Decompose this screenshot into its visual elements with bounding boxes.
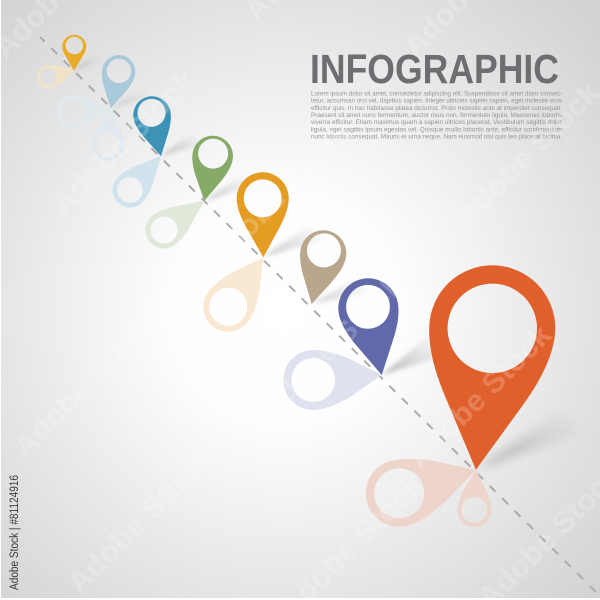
stock credit: Adobe Stock | #81124916: [9, 475, 21, 590]
pin 4: green: [184, 132, 236, 204]
body text: [311, 90, 562, 141]
ghost pin: blue reflection: [105, 144, 174, 215]
watermark: Adobe Stock: [450, 76, 600, 233]
pin 7: indigo: [333, 273, 411, 381]
watermark: Adobe Stock: [46, 64, 202, 221]
watermark: Adobe Stock: [254, 268, 410, 425]
watermark: Adobe Stock: [202, 116, 358, 273]
pin 8: large red-orange: [413, 258, 562, 477]
watermark: Adobe Stock: [62, 443, 218, 600]
body text: Lorem ipsum dolor sit amet, consectetur adipiscing elit. Suspendisse sit amet diam consec-: [311, 90, 562, 97]
ghost pin: indigo reflection: [281, 345, 384, 412]
body text: efficitur quis. In hac habitasse platea dictumst. Proin molestie ante at imperdiet consequat.: [311, 105, 562, 112]
body text: ligula, eget sagittis ipsum egestas vel. Quisque mollis lobortis ante, efficitur condimentum: [311, 126, 562, 133]
ghost pin: light blue reflection left: [55, 92, 112, 130]
pin 5: orange: [236, 172, 289, 258]
ghost pin: light blue reflection below: [91, 107, 127, 162]
body text: Praesent sit amet nunc fermentum, auctor risus non, fermentum ligula. Maecenas lobortis: [311, 112, 562, 119]
pin 3: blue: [130, 93, 179, 160]
drop shadows of pins: [74, 55, 582, 470]
watermark: Adobe Stock: [402, 318, 558, 475]
pin 1: yellow: [62, 34, 87, 71]
body text: tetur, accumsan orci vel, dapibus sapien. Integer ultricies sapien sapien, eget molestie eros: [311, 98, 562, 105]
pin 6: tan: [289, 226, 351, 309]
title: INFOGRAPHIC: [310, 46, 559, 92]
watermark: Adobe Stock: [8, 307, 164, 464]
ghost pin: green reflection: [138, 186, 215, 256]
ghost pin: orange reflection: [193, 243, 284, 342]
body text: viverra efficitur. Etiam maximus quam a sapien ultrices placerat. Vestibulum sagittis dolor: [311, 119, 562, 126]
pin 2: light blue: [94, 52, 139, 112]
ghost pin: small yellow reflection: [35, 60, 77, 90]
ghost pin: large red reflection left: [358, 438, 486, 535]
body text: nunc lobortis consequat. Mauris et urna neque. Nam euismod nisi quis leo placerat lacinia.: [311, 134, 562, 141]
ghost pin: small red reflection below: [457, 469, 493, 528]
